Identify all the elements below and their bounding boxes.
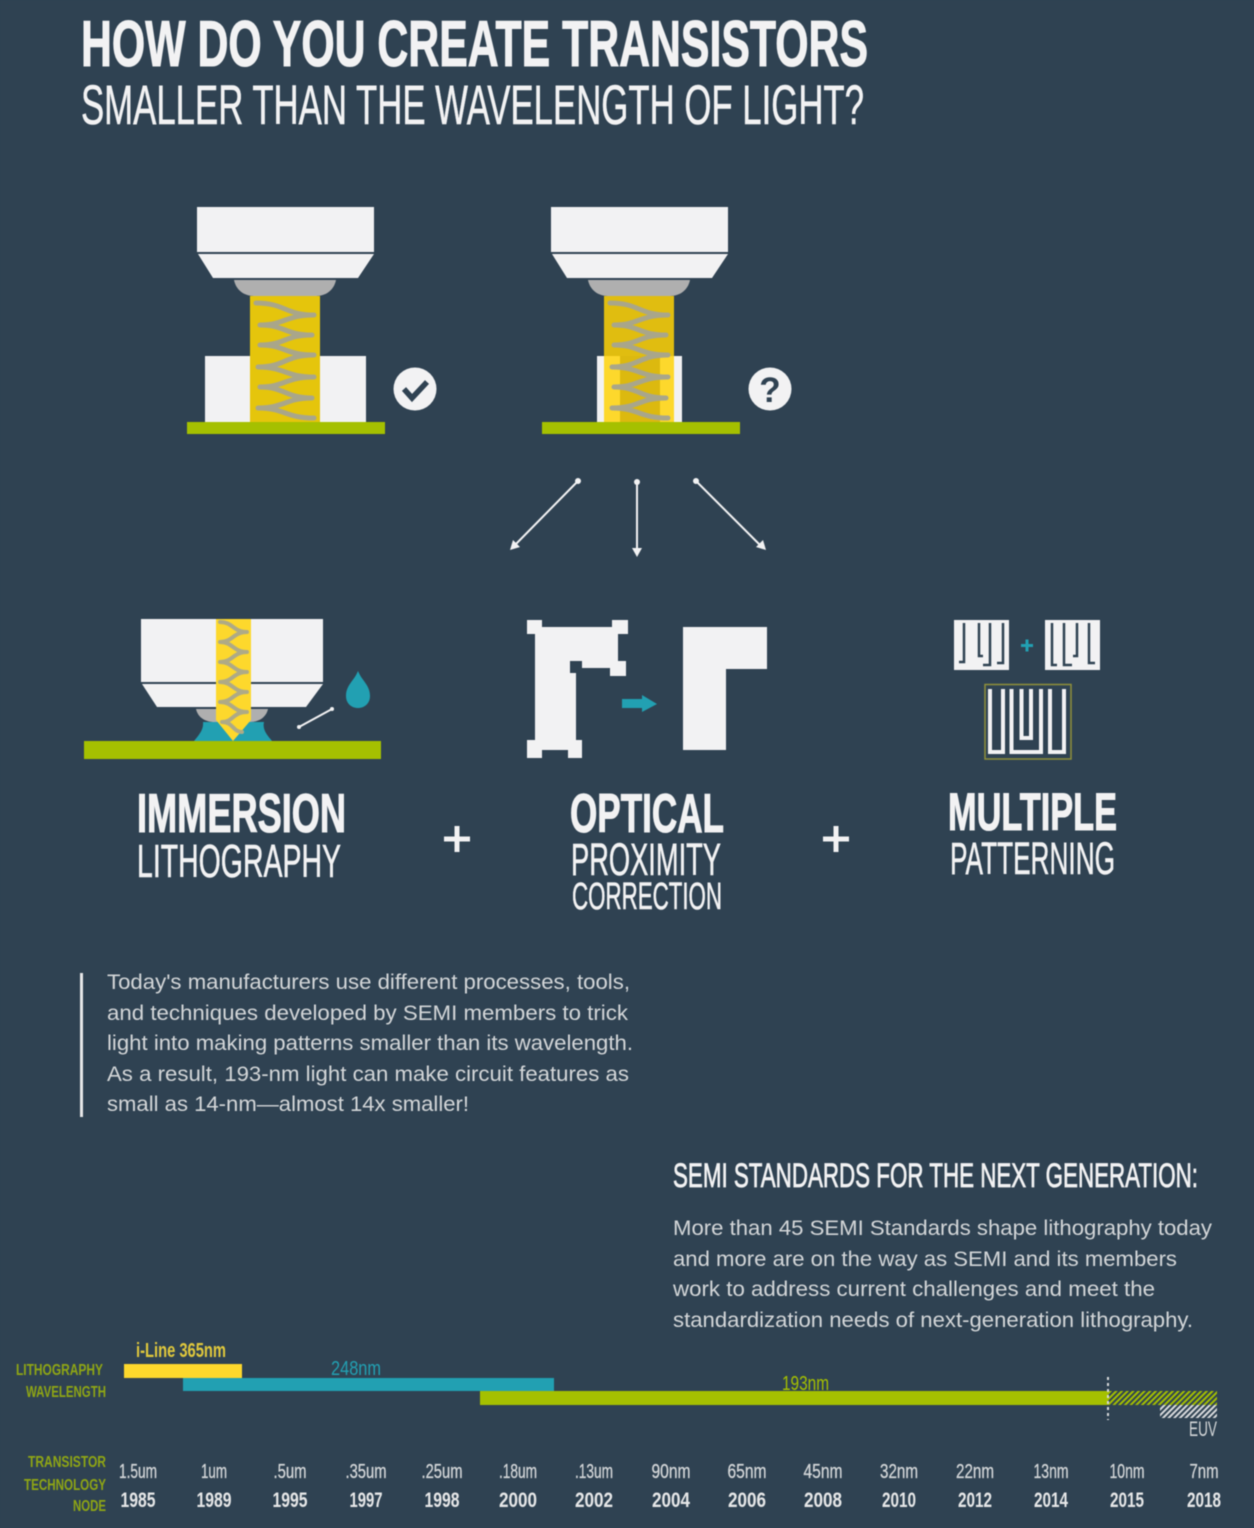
projection lens housing	[551, 207, 728, 278]
bar: EUV	[1160, 1405, 1217, 1441]
node sizes: .25um	[422, 1461, 462, 1483]
row label: TRANSISTOR	[28, 1454, 106, 1471]
heading: optical proximity correction: OPTICAL	[570, 782, 724, 844]
node sizes: 10nm	[1110, 1461, 1144, 1483]
node sizes: 1um	[201, 1461, 227, 1483]
bar: 248nm	[183, 1358, 554, 1391]
icon: multiple patterning	[954, 620, 1100, 759]
years: 2010	[882, 1489, 916, 1512]
bar: EUV: EUV	[1189, 1418, 1217, 1441]
lens housing	[141, 619, 323, 707]
heading: immersion lithography: IMMERSION	[137, 782, 346, 844]
combined pattern	[985, 684, 1071, 759]
lens	[234, 280, 336, 296]
node sizes: 32nm	[880, 1461, 918, 1483]
row label: TECHNOLOGY	[24, 1477, 106, 1494]
heading: multiple patterning: MULTIPLE	[948, 783, 1117, 842]
light wave	[256, 303, 314, 418]
node sizes: .5um	[274, 1461, 306, 1483]
years	[120, 1489, 1221, 1512]
heading: optical proximity correction: CORRECTION	[572, 876, 722, 918]
wafer	[84, 741, 381, 759]
years: 2015	[1110, 1489, 1144, 1512]
light beam	[250, 296, 320, 422]
axis label	[16, 1362, 106, 1401]
title	[81, 7, 868, 136]
text block: manufacturers: As a result, 193-nm light can make circuit features as	[107, 1063, 629, 1086]
pointer line	[297, 707, 334, 729]
arrow	[622, 695, 657, 712]
diagram: lithography works on large features	[187, 207, 436, 434]
wafer	[542, 422, 740, 434]
bar: i-Line: i-Line 365nm	[136, 1340, 226, 1362]
heading: optical proximity correction: PROXIMITY	[571, 834, 721, 885]
years: 2002	[575, 1489, 613, 1512]
years: 1985	[120, 1489, 156, 1512]
printed shape	[683, 627, 767, 750]
years: 2018	[1187, 1489, 1221, 1512]
first mask	[954, 620, 1009, 670]
years: 2004	[652, 1489, 690, 1512]
text block: manufacturers: small as 14-nm—almost 14x smaller!	[107, 1093, 469, 1116]
years: 1998	[424, 1489, 460, 1512]
text block: manufacturers: Today's manufacturers use different processes, tools,	[107, 971, 630, 994]
icon: question mark: ?	[759, 371, 781, 410]
plus	[1021, 640, 1033, 652]
node sizes: 13nm	[1034, 1461, 1068, 1483]
years: 2006	[728, 1489, 766, 1512]
heading: optical proximity correction	[570, 782, 724, 918]
table: transistor technology node	[24, 1454, 1221, 1515]
heading: immersion lithography	[137, 782, 346, 887]
years: 1997	[350, 1489, 382, 1512]
years: 1995	[272, 1489, 308, 1512]
arrows: three branches	[510, 478, 766, 557]
text block: SEMI standards: work to address current challenges and meet the	[672, 1278, 1155, 1301]
plus sign	[823, 826, 849, 852]
icon: immersion lithography	[84, 619, 381, 759]
years: 2008	[804, 1489, 842, 1512]
bar: 248nm: 248nm	[331, 1358, 381, 1380]
icon: question mark	[748, 368, 792, 410]
node sizes: 65nm	[728, 1461, 766, 1483]
icon: check mark	[394, 368, 436, 410]
node sizes: .13um	[575, 1461, 613, 1483]
axis label: WAVELENGTH	[26, 1384, 106, 1401]
lens	[588, 280, 690, 296]
node sizes: 22nm	[956, 1461, 994, 1483]
heading: immersion lithography: LITHOGRAPHY	[137, 835, 341, 887]
heading: multiple patterning	[948, 783, 1117, 884]
projection lens housing	[197, 207, 374, 278]
water	[194, 722, 272, 741]
years: 1989	[196, 1489, 232, 1512]
plus sign	[444, 826, 470, 852]
light wave	[610, 303, 668, 418]
corrected mask shape	[527, 620, 628, 758]
diagram: features smaller than wavelength	[542, 207, 792, 434]
node sizes: .35um	[346, 1461, 386, 1483]
small photoresist block	[597, 356, 682, 422]
heading: multiple patterning: PATTERNING	[950, 833, 1115, 884]
marker line	[1107, 1377, 1109, 1420]
years: 2000	[499, 1489, 537, 1512]
wafer	[187, 422, 385, 434]
title: HOW DO YOU CREATE TRANSISTORS	[81, 7, 868, 80]
text block: manufacturers	[80, 971, 633, 1117]
icon: optical proximity correction	[527, 620, 767, 758]
light wave	[220, 622, 247, 732]
node sizes: 90nm	[652, 1461, 690, 1483]
light beam	[604, 296, 674, 422]
chart: lithography wavelength timeline	[16, 1340, 1217, 1441]
years: 2014	[1034, 1489, 1068, 1512]
row label: NODE	[73, 1498, 106, 1515]
text block: SEMI standards	[672, 1217, 1213, 1332]
node sizes: 7nm	[1190, 1461, 1218, 1483]
bar: i-Line	[124, 1340, 242, 1378]
text block: SEMI standards: and more are on the way as SEMI and its members	[673, 1248, 1177, 1271]
text block: manufacturers: and techniques developed by SEMI members to trick	[107, 1002, 629, 1025]
axis label: LITHOGRAPHY	[16, 1362, 103, 1379]
node sizes: 45nm	[804, 1461, 842, 1483]
photoresist blocks	[205, 356, 366, 422]
icon: water drop	[346, 671, 370, 708]
row label	[24, 1454, 106, 1515]
light beam	[216, 619, 251, 741]
years: 2012	[958, 1489, 992, 1512]
bar: 193nm	[480, 1373, 1217, 1405]
bar: 193nm: 193nm	[782, 1373, 829, 1395]
lens	[196, 709, 268, 722]
text block: manufacturers: light into making patterns smaller than its wavelength.	[107, 1032, 633, 1055]
node sizes: 1.5um	[119, 1461, 157, 1483]
text block: SEMI standards: More than 45 SEMI Standards shape lithography today	[673, 1217, 1213, 1240]
second mask	[1045, 620, 1100, 670]
text block: SEMI standards: standardization needs of next-generation lithography.	[673, 1309, 1193, 1332]
node sizes: .18um	[499, 1461, 537, 1483]
node sizes	[119, 1461, 1218, 1483]
